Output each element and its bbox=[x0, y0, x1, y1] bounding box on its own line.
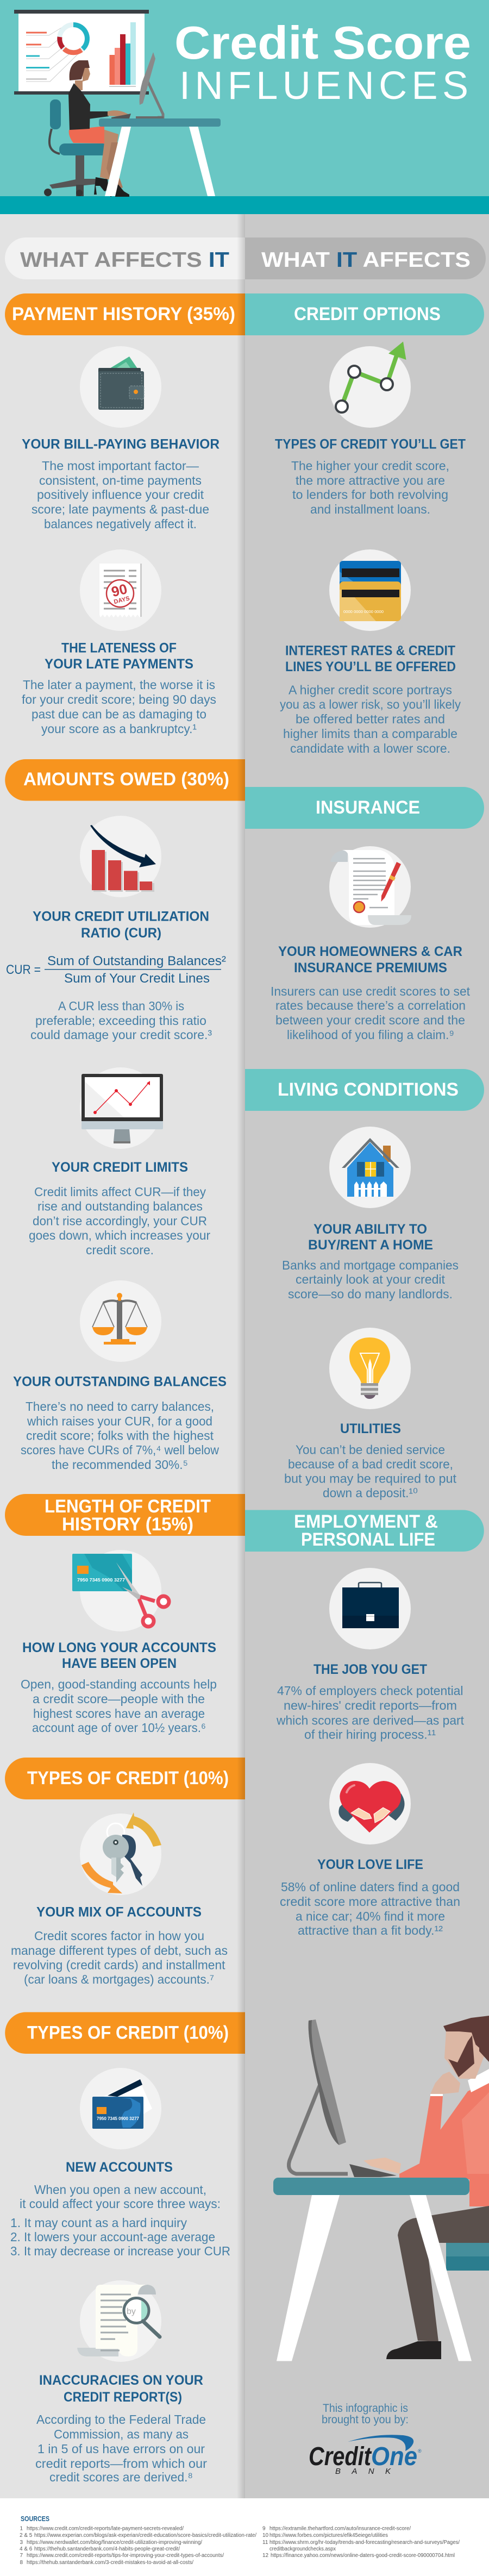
block: inaccuracies on your credit reports bbox=[35, 2280, 207, 2484]
sponsor line: brought to you by: bbox=[322, 2414, 409, 2426]
sources list right: 11 bbox=[262, 2540, 268, 2546]
icon: document and magnifying glass: by bbox=[127, 2307, 136, 2316]
body text bbox=[20, 2183, 221, 2211]
body text: manage different types of debt, such as bbox=[11, 1943, 228, 1958]
body text: past due can be as damaging to bbox=[32, 707, 206, 721]
sources list left: https://www.nerdwallet.com/blog/finance/credit-utilization-improving-winning/ bbox=[27, 2540, 202, 2546]
body text: A CUR less than 30% is bbox=[58, 999, 184, 1013]
heading: YOUR CREDIT UTILIZATION bbox=[33, 909, 209, 924]
body text: account age of over 10½ years.⁶ bbox=[32, 1721, 206, 1735]
sources list left: https://www.credit.com/credit-reports/late-payment-secrets-revealed/ bbox=[27, 2526, 184, 2532]
legs and shoes bbox=[100, 129, 118, 180]
body text: Credit scores factor in how you bbox=[34, 1929, 204, 1943]
block: your credit limits bbox=[29, 1067, 210, 1257]
category pill: types of credit: TYPES OF CREDIT (10%) bbox=[27, 1768, 229, 1789]
category pill: employment and personal life: PERSONAL LIFE bbox=[301, 1529, 435, 1550]
body text: revolving (credit cards) and installment bbox=[13, 1958, 225, 1972]
heading: INACCURACIES ON YOUR bbox=[39, 2373, 203, 2388]
heading: YOUR LATE PAYMENTS bbox=[45, 656, 193, 672]
block: the job you get bbox=[276, 1568, 465, 1741]
panel: left column what affects it bbox=[0, 214, 245, 2498]
body text bbox=[21, 1399, 219, 1472]
sources list left: 2 & 5 bbox=[20, 2533, 33, 2539]
illustration: man at computer bbox=[273, 2016, 489, 2361]
heading: LINES YOU’LL BE OFFERED bbox=[285, 659, 456, 674]
body text: credit scores are derived.⁸ bbox=[49, 2470, 193, 2484]
sources list right: creditbackgroundchecks.aspx bbox=[269, 2546, 336, 2552]
sources list left: 8 bbox=[20, 2560, 23, 2566]
icon: new credit cards: 7950 7345 0900 3277 bbox=[97, 2116, 140, 2121]
category pill: insurance bbox=[245, 787, 484, 829]
body text: and installment loans. bbox=[310, 502, 430, 516]
sources list left: 7 bbox=[20, 2553, 23, 2559]
column heading: what it affects: WHAT IT AFFECTS bbox=[261, 248, 471, 272]
body text: 58% of online daters find a good bbox=[281, 1880, 460, 1894]
icon: signed document bbox=[329, 846, 411, 928]
heading: YOUR OUTSTANDING BALANCES bbox=[13, 1374, 227, 1389]
category pill: credit options: CREDIT OPTIONS bbox=[294, 304, 441, 324]
category pill: payment history: PAYMENT HISTORY (35%) bbox=[12, 304, 235, 324]
heading: YOUR LOVE LIFE bbox=[317, 1857, 423, 1872]
category pill: credit options bbox=[245, 293, 484, 335]
block: utilities bbox=[284, 1328, 457, 1500]
icon: receipt stamped 90 days bbox=[80, 549, 161, 631]
body text: your score as a bankruptcy.¹ bbox=[41, 722, 197, 736]
icon: credit cards: 0000 0000 0000 0000 bbox=[343, 610, 384, 614]
icon: document and magnifying glass bbox=[77, 2280, 161, 2362]
sources list left: https://www.credit.com/credit-reports/tips-for-improving-your-credit-types-of-accounts/ bbox=[27, 2553, 224, 2559]
body text: don’t rise accordingly, your CUR bbox=[33, 1214, 207, 1228]
body text: down a deposit.¹⁰ bbox=[323, 1486, 418, 1500]
block: your bill-paying behavior bbox=[22, 346, 220, 531]
heading bbox=[278, 944, 462, 976]
category pill: types of credit bbox=[5, 1758, 245, 1799]
body text: a credit score—people with the bbox=[33, 1692, 205, 1706]
body text: balances negatively affect it. bbox=[44, 517, 197, 531]
body text: rise and outstanding balances bbox=[37, 1199, 203, 1213]
body text bbox=[280, 1880, 460, 1937]
numbered list: 3. It may decrease or increase your CUR bbox=[10, 2244, 230, 2258]
heading: INSURANCE PREMIUMS bbox=[294, 960, 447, 976]
formula: Sum of Outstanding Balances² bbox=[47, 954, 226, 968]
body text: goes down, which increases your bbox=[29, 1228, 210, 1242]
sources list left: 3 bbox=[20, 2540, 23, 2546]
sponsor line bbox=[322, 2402, 409, 2426]
heading bbox=[45, 640, 193, 672]
block: types of credit you'll get bbox=[275, 341, 466, 516]
icon: credit card and scissors bbox=[72, 1550, 169, 1631]
sources list right: https://www.forbes.com/pictures/efik45eiege/utilities bbox=[269, 2533, 388, 2539]
header banner bbox=[0, 0, 489, 214]
category pill: types of credit second bbox=[5, 2012, 245, 2054]
column heading: what it affects bbox=[245, 237, 486, 279]
heading: NEW ACCOUNTS bbox=[66, 2160, 173, 2175]
column heading: what affects it: WHAT AFFECTS IT bbox=[20, 248, 229, 272]
body text bbox=[11, 1929, 228, 1986]
body text: between your credit score and the bbox=[275, 1013, 465, 1027]
title: Credit Score bbox=[174, 17, 471, 69]
body text bbox=[282, 1258, 459, 1301]
body text: credit score. bbox=[86, 1243, 154, 1257]
block: ability to buy or rent a home bbox=[282, 1127, 459, 1301]
body text: Open, good-standing accounts help bbox=[21, 1677, 217, 1691]
block: new accounts bbox=[10, 2068, 230, 2258]
body text: be offered better rates and bbox=[296, 712, 445, 726]
block: your love life bbox=[280, 1763, 460, 1937]
body text: you as a lower risk, so you’ll likely bbox=[280, 697, 461, 711]
heading: HAVE BEEN OPEN bbox=[62, 1656, 177, 1671]
body text: Commission, as many as bbox=[54, 2427, 189, 2441]
icon: hands hugging heart bbox=[329, 1763, 411, 1845]
computer bbox=[148, 82, 163, 117]
formula: Sum of Your Credit Lines bbox=[64, 971, 210, 986]
body text: certainly look at your credit bbox=[296, 1272, 446, 1286]
heading: RATIO (CUR) bbox=[81, 926, 161, 941]
body text: which scores are derived—as part bbox=[276, 1713, 465, 1727]
heading: YOUR HOMEOWNERS & CAR bbox=[278, 944, 462, 959]
body text bbox=[280, 683, 461, 755]
body text: a nice car; 40% find it more bbox=[296, 1909, 445, 1923]
block: your mix of accounts bbox=[11, 1812, 228, 1986]
man torso and head bbox=[349, 2016, 489, 2206]
block: how long your accounts have been open bbox=[21, 1550, 217, 1735]
sources heading: SOURCES bbox=[21, 2515, 49, 2523]
body text: (car loans & mortgages) accounts.⁷ bbox=[24, 1972, 214, 1986]
heading bbox=[39, 2373, 203, 2405]
body text bbox=[22, 678, 216, 736]
body text: the more attractive you are bbox=[296, 473, 445, 487]
icon: balance scale bbox=[80, 1280, 161, 1362]
sources list right: 10 bbox=[262, 2533, 269, 2539]
body text: A higher credit score portrays bbox=[289, 683, 452, 697]
icon: briefcase bbox=[329, 1568, 411, 1649]
body text: Credit limits affect CUR—if they bbox=[34, 1185, 206, 1199]
heading: INTEREST RATES & CREDIT bbox=[285, 643, 455, 659]
category pill: payment history bbox=[5, 293, 245, 335]
body text: consistent, on-time payments bbox=[39, 473, 202, 487]
body text: There’s no need to carry balances, bbox=[26, 1399, 214, 1414]
logo: Credit One Bank bbox=[309, 2435, 422, 2476]
category pill: living conditions: LIVING CONDITIONS bbox=[278, 1079, 459, 1100]
body text: You can’t be denied service bbox=[296, 1442, 445, 1456]
column heading: what affects it bbox=[5, 237, 245, 279]
body text: preferable; exceeding this ratio bbox=[35, 1014, 206, 1028]
body text: score; late payments & past-due bbox=[32, 502, 209, 516]
sources list right: https://extramile.thehartford.com/auto/insurance-credit-score/ bbox=[269, 2526, 411, 2532]
icon: falling bar chart bbox=[80, 816, 161, 897]
body text: According to the Federal Trade bbox=[36, 2412, 206, 2427]
body text: Banks and mortgage companies bbox=[282, 1258, 459, 1272]
illustration: presentation board bbox=[14, 10, 149, 95]
logo: Credit One Bank: One bbox=[371, 2442, 417, 2471]
body text: because of a bad credit score, bbox=[288, 1457, 453, 1471]
title bbox=[174, 17, 471, 108]
icon: house bbox=[329, 1127, 411, 1208]
heading bbox=[285, 643, 456, 674]
heading bbox=[22, 1640, 216, 1671]
heading: YOUR MIX OF ACCOUNTS bbox=[36, 1904, 202, 1920]
chair bbox=[44, 99, 108, 196]
skirt bbox=[69, 126, 104, 143]
sources list right bbox=[262, 2526, 460, 2559]
column divider shadow bbox=[237, 214, 245, 2498]
icon: receipt stamped 90 days: DAYS bbox=[113, 595, 130, 605]
block: your outstanding balances bbox=[13, 1280, 227, 1472]
block: homeowners and car insurance premiums bbox=[271, 846, 471, 1042]
desk bbox=[273, 2178, 472, 2361]
body text: highest scores have an average bbox=[33, 1706, 205, 1721]
category pill: employment and personal life: EMPLOYMENT & bbox=[294, 1511, 438, 1532]
heading: YOUR BILL-PAYING BEHAVIOR bbox=[22, 437, 220, 452]
body text: of their hiring process.¹¹ bbox=[304, 1727, 436, 1741]
heading: THE JOB YOU GET bbox=[314, 1662, 427, 1677]
numbered list: 2. It lowers your account-age average bbox=[10, 2230, 215, 2244]
sources list left bbox=[20, 2526, 256, 2566]
formula bbox=[6, 954, 226, 986]
body text bbox=[21, 1677, 217, 1735]
body text: 47% of employers check potential bbox=[277, 1684, 463, 1698]
body text: When you open a new account, bbox=[34, 2183, 206, 2197]
category pill: amounts owed bbox=[5, 759, 245, 801]
torso bbox=[75, 80, 83, 90]
man legs and chair bbox=[386, 2206, 489, 2359]
category pill: amounts owed: AMOUNTS OWED (30%) bbox=[23, 769, 229, 790]
body text bbox=[271, 984, 471, 1042]
sources list right: https://finance.yahoo.com/news/online-daters-good-credit-score-090000704.html bbox=[271, 2553, 455, 2559]
heading: HOW LONG YOUR ACCOUNTS bbox=[22, 1640, 216, 1655]
sources list right: 12 bbox=[262, 2553, 269, 2559]
body text: scores have CURs of 7%,⁴ well below bbox=[21, 1443, 219, 1457]
category pill: employment and personal life bbox=[245, 1510, 484, 1552]
icon: computer monitor with chart bbox=[80, 1067, 163, 1149]
heading: TYPES OF CREDIT YOU’LL GET bbox=[275, 437, 466, 452]
body text bbox=[32, 459, 209, 531]
body text: Insurers can use credit scores to set bbox=[271, 984, 471, 998]
body text: The most important factor— bbox=[42, 459, 199, 473]
body text: The higher your credit score, bbox=[291, 459, 449, 473]
body text: higher limits than a comparable bbox=[283, 727, 457, 741]
icon: new credit cards bbox=[80, 2068, 161, 2149]
icon: credit card and scissors: 7950 7345 0900 3277 bbox=[77, 1577, 125, 1583]
body text bbox=[29, 1185, 210, 1257]
icon: receipt stamped 90 days: 90 bbox=[110, 580, 129, 600]
body text: score—so do many landlords. bbox=[288, 1287, 453, 1301]
body text: attractive than a fit body.¹² bbox=[298, 1923, 443, 1937]
heading bbox=[308, 1222, 433, 1253]
heading: BUY/RENT A HOME bbox=[308, 1237, 433, 1253]
body text: to lenders for both revolving bbox=[292, 487, 448, 502]
body text: which raises your CUR, for a good bbox=[27, 1414, 212, 1428]
block: the lateness of your late payments bbox=[22, 549, 216, 736]
body text: it could affect your score three ways: bbox=[20, 2197, 221, 2211]
sources list left: https://www.experian.com/blogs/ask-experian/credit-education/score-basics/credit-utilization-rate/ bbox=[34, 2533, 256, 2539]
heading: CREDIT REPORT(S) bbox=[64, 2390, 182, 2405]
icon: light bulb bbox=[329, 1328, 411, 1409]
title: INFLUENCES bbox=[179, 64, 468, 108]
category pill: length of credit history: LENGTH OF CREDIT bbox=[45, 1496, 211, 1517]
numbered list: 1. It may count as a hard inquiry bbox=[10, 2216, 187, 2230]
body text bbox=[35, 2412, 207, 2484]
body text: credit reports—from which our bbox=[35, 2456, 207, 2471]
sources bbox=[20, 2515, 460, 2566]
heading: THE LATENESS OF bbox=[61, 640, 177, 655]
sources list right: https://www.shrm.org/hr-today/trends-and-forecasting/research-and-surveys/Pages/ bbox=[269, 2540, 460, 2546]
body text: likelihood of you filing a claim.⁹ bbox=[287, 1028, 454, 1042]
heading bbox=[33, 909, 209, 941]
heading: YOUR ABILITY TO bbox=[314, 1222, 427, 1237]
body text: credit score; folks with the highest bbox=[26, 1428, 214, 1442]
category pill: insurance: INSURANCE bbox=[316, 797, 420, 818]
sources list left: https://thehub.santanderbank.com/4-habits-people-great-credit/ bbox=[34, 2546, 180, 2552]
body text: The later a payment, the worse it is bbox=[23, 678, 215, 692]
body text: new-hires' credit reports—from bbox=[284, 1698, 457, 1712]
heading: YOUR CREDIT LIMITS bbox=[52, 1160, 188, 1175]
desk legs bbox=[105, 127, 131, 196]
icon: rising line chart bbox=[329, 341, 411, 428]
body text: rates because there’s a correlation bbox=[275, 998, 466, 1012]
body text: candidate with a lower score. bbox=[290, 741, 450, 755]
icon: wallet bbox=[80, 346, 161, 428]
sponsor credit bbox=[309, 2402, 422, 2476]
body text bbox=[291, 459, 449, 516]
body text: 1 in 5 of us have errors on our bbox=[37, 2442, 205, 2456]
category pill: length of credit history: HISTORY (15%) bbox=[62, 1514, 193, 1535]
category pill: types of credit second: TYPES OF CREDIT (10%) bbox=[27, 2023, 229, 2043]
numbered list bbox=[10, 2216, 230, 2258]
formula: CUR = bbox=[6, 962, 41, 977]
block: credit utilization ratio bbox=[6, 816, 226, 1042]
sources list right: 9 bbox=[262, 2526, 266, 2532]
body text: but you may be required to put bbox=[284, 1472, 457, 1486]
sources list left: https://thehub.santanderbank.com/3-credit-mistakes-to-avoid-at-all-costs/ bbox=[27, 2560, 193, 2566]
illustration: woman at desk bbox=[44, 52, 221, 197]
sources list left: 1 bbox=[20, 2526, 23, 2532]
body text: for your credit score; being 90 days bbox=[22, 692, 216, 706]
panel: right column what it affects bbox=[245, 214, 489, 2498]
heading: UTILITIES bbox=[340, 1421, 401, 1436]
logo: Credit One Bank: Credit bbox=[309, 2442, 372, 2471]
logo: Credit One Bank: BANK bbox=[335, 2467, 391, 2476]
logo: Credit One Bank: ® bbox=[418, 2448, 422, 2454]
body text: credit score more attractive than bbox=[280, 1895, 460, 1909]
block: interest rates and credit lines bbox=[280, 549, 461, 755]
body text bbox=[30, 999, 212, 1042]
body text: could damage your credit score.³ bbox=[30, 1028, 212, 1042]
sponsor line: This infographic is bbox=[323, 2402, 408, 2415]
body text: the recommended 30%.⁵ bbox=[52, 1458, 188, 1472]
body text bbox=[276, 1684, 465, 1741]
sources list left: 4 & 6 bbox=[20, 2546, 33, 2552]
body text bbox=[284, 1442, 457, 1500]
computer monitor bbox=[289, 2019, 348, 2174]
category pill: living conditions bbox=[245, 1069, 484, 1111]
icon: keys with circular arrows bbox=[80, 1812, 161, 1895]
head bbox=[83, 66, 90, 82]
body text: positively influence your credit bbox=[37, 487, 204, 502]
icon: credit cards bbox=[329, 549, 411, 631]
category pill: length of credit history bbox=[5, 1494, 245, 1536]
